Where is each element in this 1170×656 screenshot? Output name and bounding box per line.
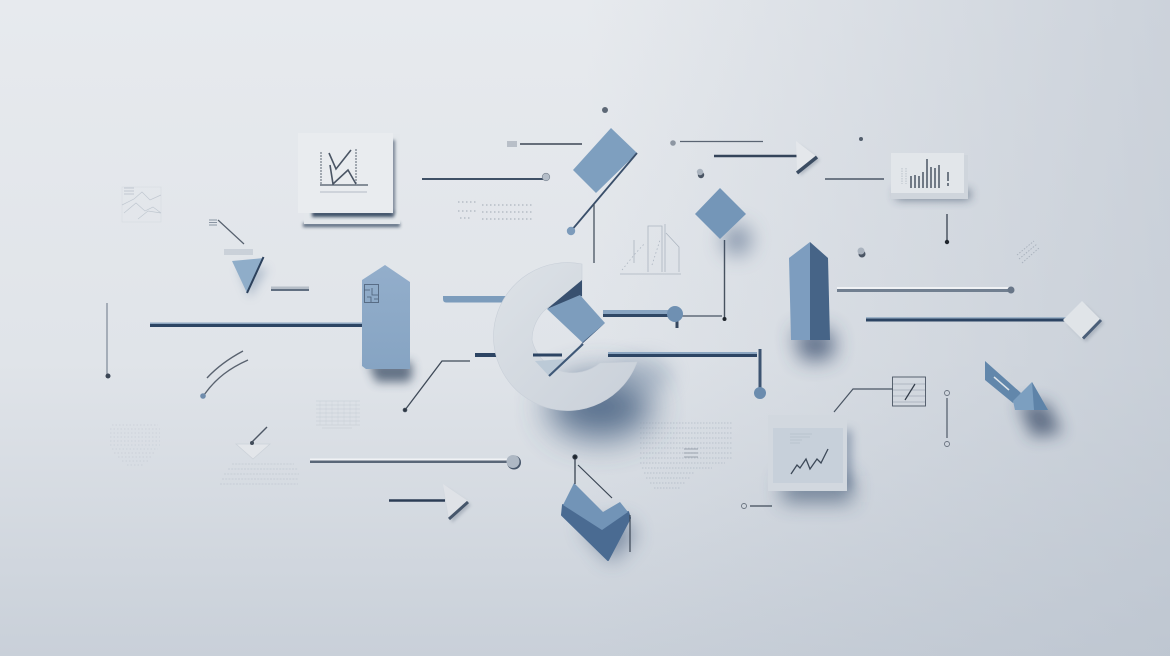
connector with end ball, top [422,173,550,181]
long bar to elbow [608,349,766,399]
vertical pin line, left [106,303,110,378]
faint hatch, far right [1017,241,1039,263]
ring: partial circle [494,263,637,411]
vertical marker, right [944,390,950,446]
arrow, bottom [389,484,471,523]
building block, left [362,265,412,382]
faint bar outline chart [620,224,681,274]
pins on chevron [573,455,630,552]
line chart [791,449,828,474]
line to bar chart card [825,178,884,180]
ring inner band [533,354,562,356]
line chart in card [320,149,368,192]
upper connector, right [837,286,1014,294]
small pin over faint triangle [236,427,270,459]
left bar behind ring [443,296,514,302]
connector: label with diagonal line [209,220,253,254]
bar chart card [891,153,970,199]
ring shadow [548,357,672,439]
lower horizontal bar, left part [475,353,501,357]
chart card, top-left [298,133,400,227]
faint text-like lines [220,464,299,484]
faint grid blob, lower left [110,425,160,465]
curved arcs [200,351,248,399]
light diamond, far right [1063,301,1104,342]
translucent chart card [768,415,852,502]
pin below bar chart card [945,214,949,244]
faint dot grid, centre bottom [640,423,732,488]
main horizontal bar to building [150,322,362,327]
blue arrow shape, right [985,361,1062,437]
faint data table [458,202,532,219]
small grey bar [271,286,309,291]
arrow, top right [714,141,820,176]
small top arrow line [507,142,582,146]
diamond, centre right [695,188,751,255]
faint chart: top-left sketch [122,187,161,222]
bars [902,159,948,188]
faint grid, centre-left [316,401,360,428]
long connector with ball, bottom [310,455,521,470]
connector from ring to right ball [603,240,726,328]
bracket chart box [834,377,926,412]
chevron block, bottom [562,455,636,563]
small triangle inside ring [535,359,566,376]
elbow line to pin [403,361,470,412]
thin line group, top right [670,140,763,146]
lower connector, right [866,317,1073,322]
blue block in ring [547,280,605,376]
blue diamond, top centre [567,128,637,263]
small dot, top [602,107,608,113]
small dots, top right [697,137,866,258]
small arrow, bottom right of card [742,504,772,508]
prism, centre right [789,242,835,360]
icon: blue triangle [232,257,268,298]
